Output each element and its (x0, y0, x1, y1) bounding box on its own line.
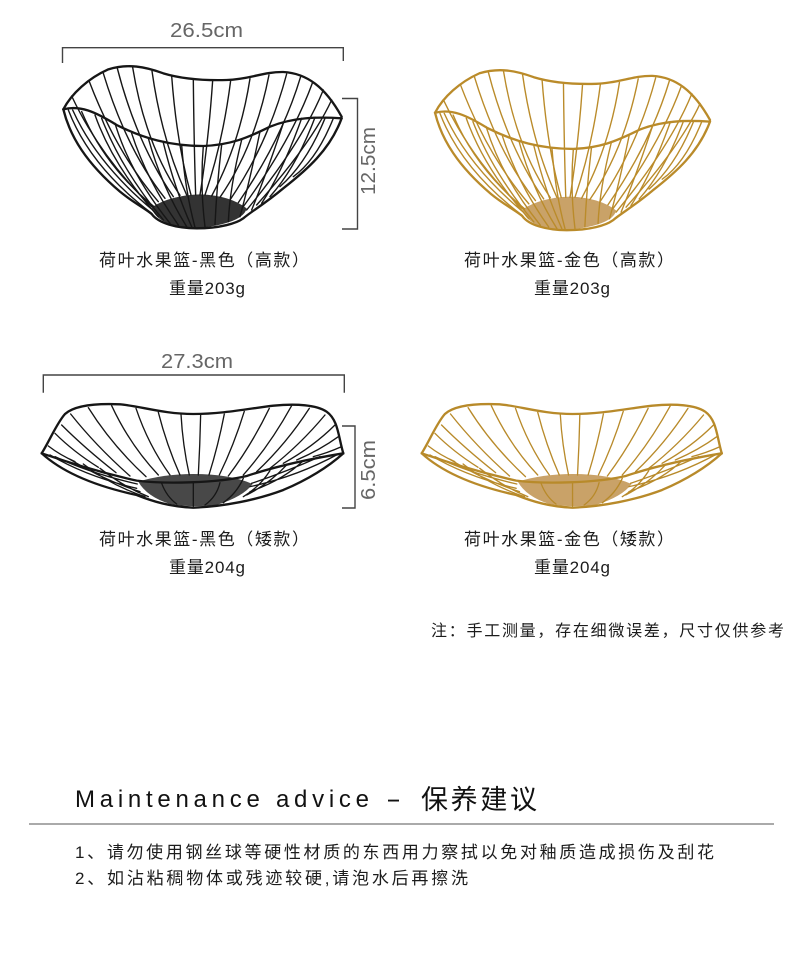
label: black tall basket (99, 251, 309, 298)
dimension: tall basket width (62, 20, 343, 63)
dimension: short basket height: 6.5cm (358, 440, 380, 500)
label: gold tall basket: 荷叶水果篮-金色（高款） (464, 251, 674, 270)
label: gold tall basket: 重量203g (534, 279, 610, 298)
icon: black short basket (42, 404, 343, 508)
text: maintenance advice list: 1、请勿使用钢丝球等硬性材质的东西用力察拭以免对釉质造成损伤及刮花 (75, 842, 714, 862)
text: maintenance advice list: 2、如沾粘稠物体或残迹较硬,请泡水后再擦洗 (75, 869, 468, 888)
heading: maintenance advice: 保养建议 (421, 785, 537, 815)
heading: maintenance advice (75, 785, 537, 815)
note: measurement disclaimer: 注：手工测量，存在细微误差，尺寸仅供参考 (431, 622, 784, 640)
dimension: short basket width (43, 351, 344, 393)
label: black short basket (99, 530, 309, 577)
label: black short basket: 重量204g (169, 558, 245, 577)
dimension: short basket width: 27.3cm (161, 351, 233, 373)
label: gold short basket (464, 530, 674, 577)
dimension: tall basket height (342, 98, 380, 229)
icon: gold short basket (422, 404, 722, 508)
icon: gold tall basket (435, 70, 710, 230)
heading: maintenance advice: Maintenance advice (75, 786, 369, 813)
dimension: tall basket width: 26.5cm (170, 20, 243, 42)
text: maintenance advice list (75, 842, 714, 888)
icon: black tall basket (63, 66, 342, 228)
dimension: short basket height (342, 426, 380, 508)
label: gold tall basket (464, 251, 674, 298)
label: gold short basket: 重量204g (534, 558, 610, 577)
heading: maintenance advice: - (386, 786, 401, 813)
label: gold short basket: 荷叶水果篮-金色（矮款） (464, 530, 674, 549)
dimension: tall basket height: 12.5cm (358, 127, 380, 195)
label: black tall basket: 荷叶水果篮-黑色（高款） (99, 251, 309, 270)
label: black tall basket: 重量203g (169, 279, 245, 298)
label: black short basket: 荷叶水果篮-黑色（矮款） (99, 530, 309, 549)
